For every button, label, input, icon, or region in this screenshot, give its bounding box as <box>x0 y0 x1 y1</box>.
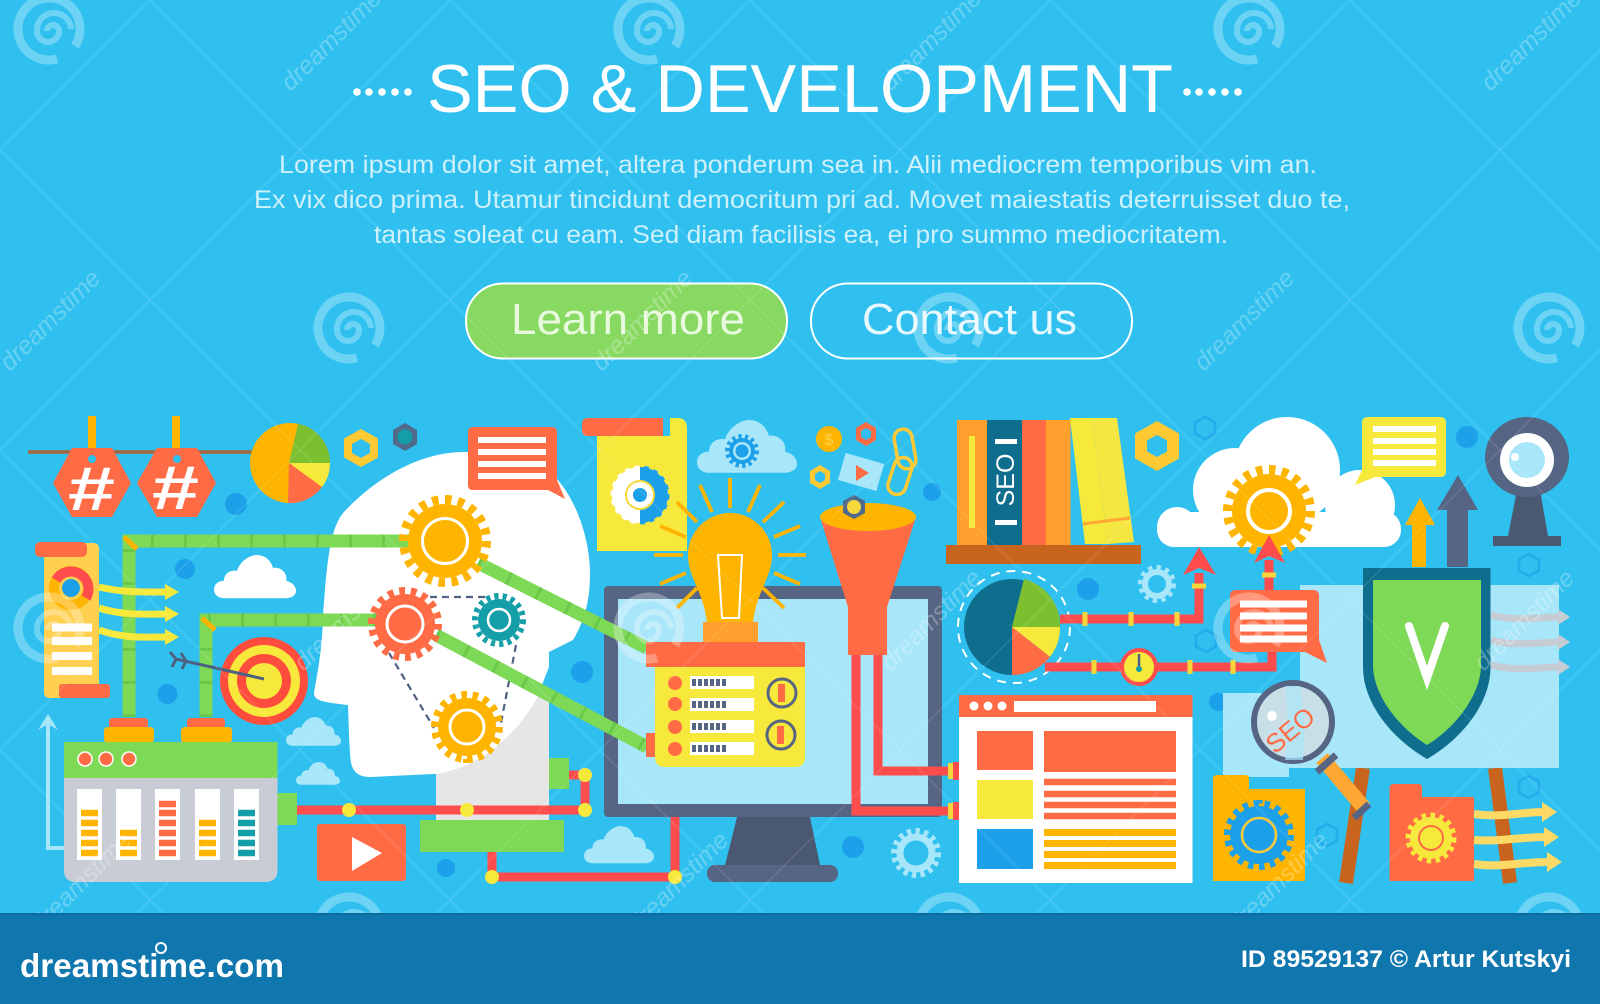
magnifier: SEO <box>1260 701 1321 759</box>
footer credit: ID 89529137 © Artur Kutskyi <box>1241 946 1571 973</box>
intro paragraph: tantas soleat cu eam. Sed diam facilisis ea, ei pro summo mediocritatem. <box>374 221 1228 249</box>
button: contact us <box>811 284 1132 358</box>
big yellow hex nut <box>1135 421 1179 471</box>
shield <box>1363 568 1490 759</box>
hashtag tag 1: # <box>68 455 115 524</box>
small background dots <box>158 426 1478 877</box>
pie chart top left <box>250 423 330 503</box>
speech bubble red <box>468 427 565 499</box>
hashtag tag 1 <box>53 448 131 524</box>
tan arrows right <box>1474 802 1562 872</box>
faint hexagons <box>1195 417 1539 846</box>
intro paragraph <box>254 151 1350 249</box>
button: learn more <box>466 284 787 358</box>
hashtag tag 2: # <box>152 454 199 523</box>
grey arrows <box>1491 609 1570 675</box>
hashtag line with two tags <box>28 416 255 524</box>
light cloud 2 <box>296 762 340 785</box>
plugs <box>104 718 232 743</box>
large white cloud <box>1157 417 1401 547</box>
funnel with pipes <box>820 495 960 820</box>
light blue up arrow <box>38 714 64 848</box>
books on shelf: SEO <box>992 454 1020 506</box>
red speech bubble right <box>1230 590 1327 663</box>
target with arrow <box>170 637 308 725</box>
light cloud lower middle <box>584 826 654 863</box>
dashed gear links <box>389 597 516 728</box>
gear: lower orange <box>435 695 499 759</box>
watermark layer: dreamstime <box>622 826 734 938</box>
gear: teal <box>475 596 523 644</box>
gear in cloud <box>1228 470 1310 552</box>
button: contact us: Contact us <box>862 295 1077 344</box>
red flow lines with arrows <box>1045 535 1285 684</box>
green diagonal pipes to server <box>436 563 647 747</box>
easel board <box>1223 585 1559 883</box>
gear: red <box>372 591 438 657</box>
hex nuts <box>344 423 417 467</box>
folder orange with gear <box>1213 775 1305 881</box>
yellow arrows from scroll <box>99 584 179 645</box>
cloud white left <box>214 555 296 598</box>
webcam <box>1485 417 1569 546</box>
green pipes from gears <box>124 537 445 717</box>
title: SEO & DEVELOPMENT <box>427 51 1173 127</box>
light gear bottom <box>894 831 938 875</box>
dashboard window with bars <box>64 742 278 882</box>
pie chart with flow lines <box>958 571 1070 683</box>
footer bar <box>0 913 1600 1004</box>
video play block <box>317 824 406 881</box>
watermark layer: dreamstime <box>288 564 400 676</box>
head silhouette <box>314 452 590 820</box>
button: learn more: Learn more <box>511 295 745 344</box>
watermark layer: dreamstime <box>586 264 698 376</box>
coin, nuts, video card, chain <box>810 422 917 497</box>
magnifier <box>1254 683 1369 818</box>
hashtag tag 2 <box>137 448 216 523</box>
up arrows <box>1405 475 1478 567</box>
intro paragraph: Lorem ipsum dolor sit amet, altera ponderum sea in. Alii mediocrem temporibus vim an. <box>279 151 1317 179</box>
browser window <box>959 695 1192 883</box>
watermark layer: dreamstime <box>25 826 137 938</box>
watermark layer: dreamstime <box>875 564 987 676</box>
server panel <box>646 642 805 767</box>
light gear near books <box>1140 567 1174 601</box>
red network lines lower left <box>278 758 682 884</box>
light bulb with rays <box>654 478 806 643</box>
intro paragraph: Ex vix dico prima. Utamur tincidunt democritum pri ad. Movet maiestatis deterruisset duo te, <box>254 186 1350 214</box>
folder red with gear <box>1390 784 1474 881</box>
yellow speech bubble <box>1355 417 1446 485</box>
footer logo: dreamstime.com <box>20 947 284 984</box>
gear: large orange <box>404 500 486 582</box>
books on shelf <box>946 418 1141 564</box>
coin, nuts, video card, chain: $ <box>825 432 834 449</box>
monitor <box>604 586 942 882</box>
watermark layer: dreamstime <box>1468 564 1580 676</box>
document with half gear <box>582 418 687 551</box>
cloud with blue gear <box>697 420 797 473</box>
light cloud 1 <box>286 717 341 746</box>
watermark layer: dreamstime <box>1188 264 1300 376</box>
scroll with donut <box>35 542 110 698</box>
watermark layer: dreamstime <box>1222 826 1334 938</box>
